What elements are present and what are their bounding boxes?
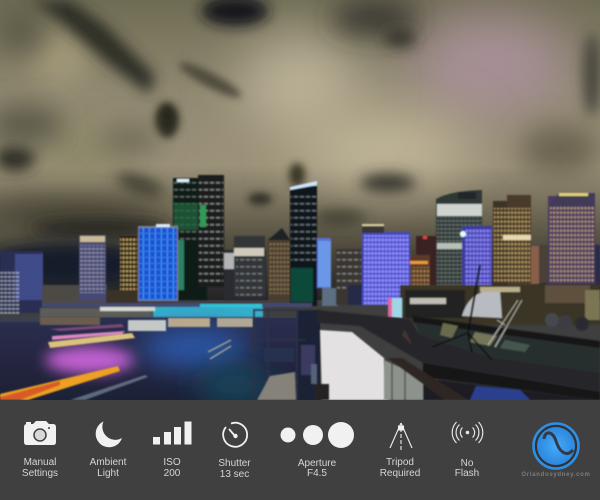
logo: Orlandosydney.com — [521, 424, 591, 478]
label: Required — [380, 468, 420, 479]
item: shutter — [218, 423, 251, 480]
icon: aperture circles — [280, 422, 354, 448]
label: Aperture — [298, 458, 337, 469]
label: Shutter — [218, 458, 251, 469]
icon: camera — [24, 421, 56, 445]
label: 13 sec — [220, 469, 249, 480]
item: tripod — [380, 423, 420, 479]
icon: tripod — [390, 423, 412, 450]
logo: Orlandosydney.com: Orlandosydney.com — [521, 472, 591, 478]
label: Flash — [455, 468, 479, 479]
label: Manual — [24, 457, 56, 468]
label: ISO — [163, 457, 181, 468]
item: aperture — [280, 422, 354, 479]
label: Settings — [22, 468, 58, 479]
icon: signal bars — [153, 422, 192, 444]
bottom settings bar — [0, 400, 600, 500]
harbour water with light trails — [0, 317, 320, 405]
item: ambient light — [90, 422, 127, 479]
rooftop with tripod — [311, 265, 600, 400]
label: Tripod — [386, 457, 414, 468]
city buildings — [0, 175, 600, 325]
label: No — [461, 458, 474, 469]
icon: no flash signal — [452, 422, 483, 443]
label: Light — [97, 468, 119, 479]
cloudy sky — [0, 0, 600, 300]
label: F4.5 — [307, 468, 327, 479]
label: 200 — [164, 468, 181, 479]
scaffold and walkway — [254, 310, 320, 400]
moored boats — [0, 317, 253, 331]
item: manual settings — [22, 421, 58, 479]
icon: moon — [96, 422, 122, 447]
icon: timer — [223, 423, 247, 447]
label: Ambient — [90, 457, 127, 468]
white tent under the roof — [320, 330, 388, 400]
item: flash — [452, 422, 483, 479]
item: ISO — [153, 422, 192, 479]
